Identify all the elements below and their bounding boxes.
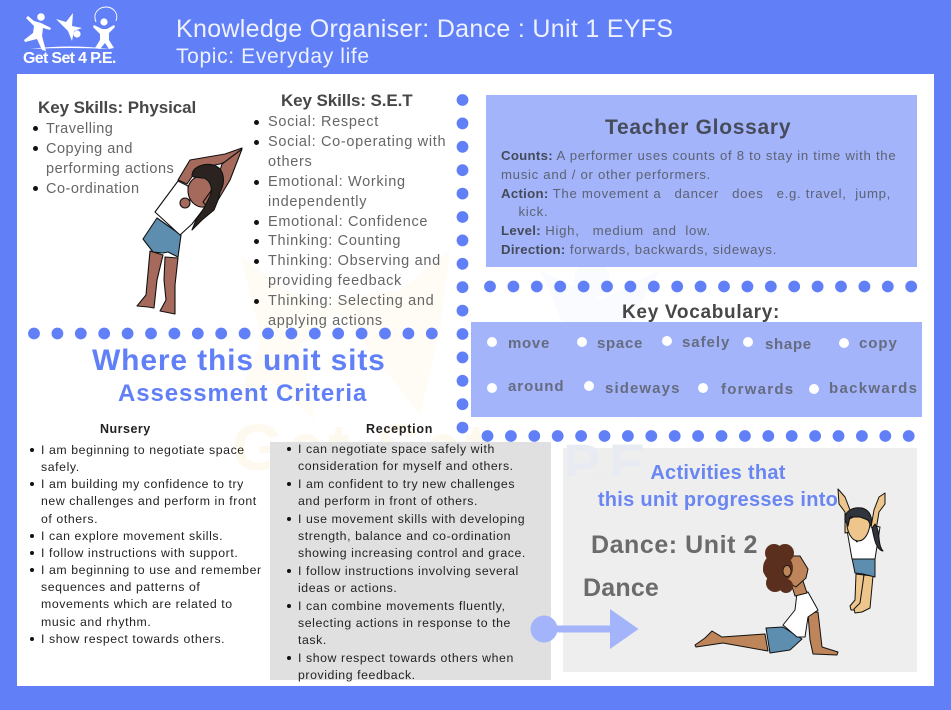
list: reception criteria: I can negotiate space safely with [298, 442, 495, 456]
list: S.E.T skills: providing feedback [268, 273, 402, 289]
list: S.E.T skills: Emotional: Working [268, 174, 406, 190]
heading: activities: Activities that [650, 462, 786, 484]
vocabulary: shape: shape [765, 336, 812, 353]
list: physical skills: Copying and [46, 141, 133, 157]
vocabulary: around: around [508, 378, 565, 395]
list: reception criteria: ideas or actions. [298, 581, 397, 595]
vocabulary: backwards: backwards [829, 380, 918, 397]
list: nursery criteria: I follow instructions with support. [41, 546, 238, 560]
list: nursery criteria: safely. [41, 460, 80, 474]
glossary text [501, 148, 896, 257]
heading: key skills S.E.T: Key Skills: S.E.T [281, 91, 413, 110]
list: S.E.T skills [254, 114, 446, 329]
list: S.E.T skills: Social: Co-operating with [268, 134, 446, 150]
list: nursery criteria: I am beginning to negotiate space [41, 443, 245, 457]
vocabulary: space [577, 335, 643, 352]
text: dance: Dance [583, 574, 659, 602]
heading: activities [598, 462, 838, 511]
glossary text: Level: High, medium and low. [501, 223, 711, 238]
illustration: child cobra pose [694, 544, 838, 656]
glossary text: Action: The movement a dancer does e.g. travel, jump, [501, 186, 891, 201]
list: reception criteria [287, 442, 526, 682]
list: nursery criteria: I show respect towards others. [41, 632, 225, 646]
list: nursery criteria: of others. [41, 512, 98, 526]
list: reception criteria: selecting actions in response to the [298, 616, 511, 630]
vocabulary: space: space [597, 335, 643, 352]
list: reception criteria: I am confident to try new challenges [298, 477, 515, 491]
logo wordmark: Get Set 4 P.E. [23, 50, 116, 67]
arrow [530, 609, 638, 649]
list: S.E.T skills: Emotional: Confidence [268, 214, 428, 230]
list: S.E.T skills: independently [268, 194, 367, 210]
heading: activities: this unit progresses into [598, 489, 838, 511]
list: reception criteria: I follow instructions involving several [298, 564, 519, 578]
grey panel: reception [270, 442, 551, 680]
glossary text: kick. [518, 204, 548, 219]
list: reception criteria: I show respect towards others when [298, 651, 514, 665]
vocabulary: shape [743, 336, 812, 353]
logo: Get Set 4 P.E. [23, 6, 118, 67]
list: physical skills: performing actions [46, 161, 174, 177]
logo figures [24, 6, 118, 51]
vocabulary: move: move [508, 335, 550, 352]
vocabulary: move [487, 335, 550, 352]
vocabulary: safely: safely [682, 334, 730, 351]
list: reception criteria: and perform in front of others. [298, 494, 478, 508]
list: reception criteria: consideration for myself and others. [298, 459, 514, 473]
list: S.E.T skills: Thinking: Selecting and [268, 293, 434, 309]
heading: assessment criteria: Assessment Criteria [118, 380, 367, 407]
list: physical skills: Co-ordination [46, 181, 140, 197]
vocabulary: sideways: sideways [605, 380, 681, 397]
list: nursery criteria: music and rhythm. [41, 615, 151, 629]
list: reception criteria: I can combine movements fluently, [298, 599, 506, 613]
panel: teacher glossary [486, 95, 917, 267]
list: nursery criteria: movements which are related to [41, 597, 233, 611]
list: S.E.T skills: Thinking: Counting [268, 233, 401, 249]
heading: where this unit sits: Where this unit sits [92, 344, 386, 377]
list: nursery criteria: sequences and patterns of [41, 580, 200, 594]
list: S.E.T skills: Social: Respect [268, 114, 379, 130]
list: physical skills: Travelling [46, 121, 113, 137]
illustration: girl side stretch [136, 147, 242, 314]
column heading: reception: Reception [366, 422, 433, 436]
glossary text: Direction: forwards, backwards, sideways. [501, 242, 777, 257]
title: Knowledge Organiser: Dance : Unit 1 EYFS [176, 15, 673, 43]
panel: key vocabulary band [471, 322, 922, 417]
list: reception criteria: showing increasing control and grace. [298, 546, 526, 560]
list: S.E.T skills: applying actions [268, 313, 383, 329]
vocabulary: copy: copy [859, 335, 898, 352]
list: S.E.T skills: others [268, 154, 312, 170]
list: reception criteria: providing feedback. [298, 668, 416, 682]
list: nursery criteria [30, 443, 262, 646]
list: nursery criteria: new challenges and perform in front [41, 494, 257, 508]
glossary heading: Teacher Glossary [605, 116, 791, 139]
glossary text: music and / or other performers. [501, 167, 711, 182]
faint background watermark text: Get Set [232, 410, 491, 484]
list: nursery criteria: I am building my confidence to try [41, 477, 244, 491]
heading: key skills physical: Key Skills: Physical [38, 98, 196, 117]
subtitle: topic: Topic: Everyday life [176, 45, 370, 68]
grey panel: activities [563, 448, 917, 672]
vocabulary: copy [839, 335, 898, 352]
illustration: girl arms raised [838, 488, 886, 614]
heading: key vocabulary: Key Vocabulary: [622, 302, 780, 323]
list: S.E.T skills: Thinking: Observing and [268, 253, 441, 269]
list: reception criteria: strength, balance and co-ordination [298, 529, 511, 543]
glossary text: Counts: A performer uses counts of 8 to stay in time with the [501, 148, 896, 163]
list: reception criteria: task. [298, 633, 327, 647]
column heading: nursery: Nursery [100, 422, 151, 436]
vocabulary: forwards: forwards [721, 381, 794, 398]
list: physical skills [33, 121, 174, 197]
text: dance unit 2: Dance: Unit 2 [591, 531, 758, 559]
list: nursery criteria: I can explore movement skills. [41, 529, 223, 543]
list: reception criteria: I use movement skills with developing [298, 512, 525, 526]
list: nursery criteria: I am beginning to use and remember [41, 563, 262, 577]
